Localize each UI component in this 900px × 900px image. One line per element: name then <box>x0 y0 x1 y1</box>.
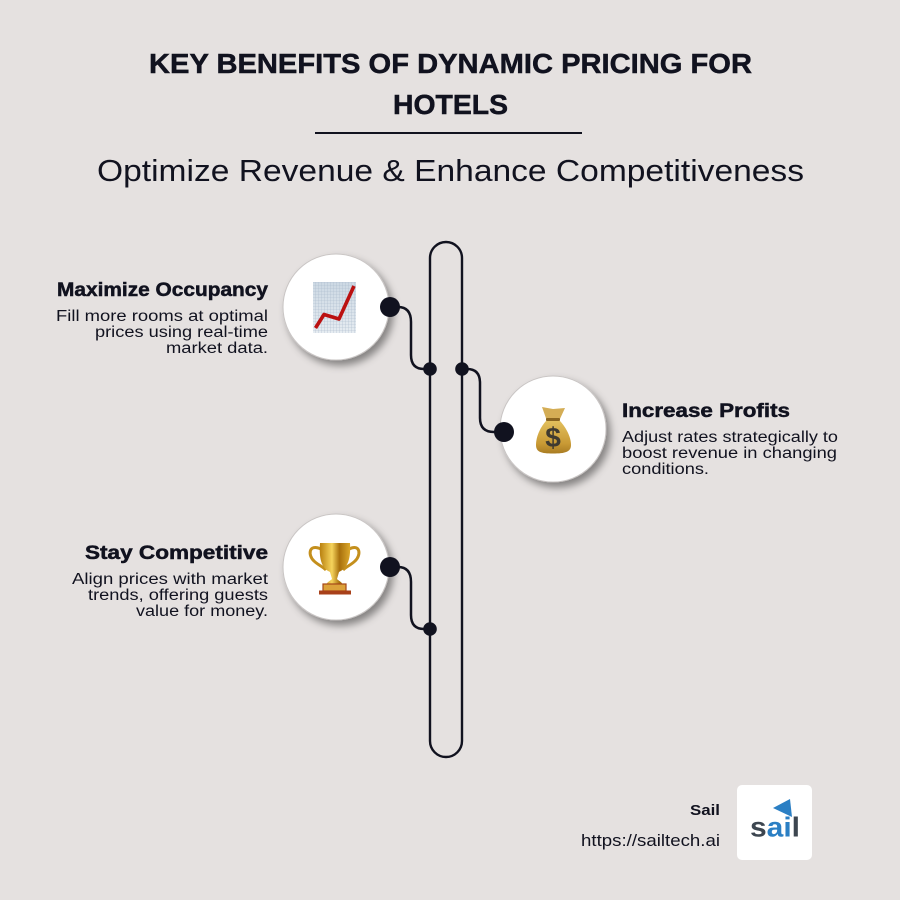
title <box>149 48 752 120</box>
text: Stay Competitive description: trends, offering guests <box>88 587 268 604</box>
text: Stay Competitive description <box>72 571 269 620</box>
icon circle: chart <box>283 254 389 360</box>
timeline pill <box>430 242 462 757</box>
text: Maximize Occupancy description: market data. <box>166 340 268 357</box>
heading: Stay Competitive: Stay Competitive <box>85 542 268 564</box>
text: Increase Profits description: boost revenue in changing <box>622 445 837 462</box>
icon circle: trophy <box>283 514 389 620</box>
text: Increase Profits description: Adjust rates strategically to <box>622 429 838 446</box>
benefit: Stay Competitive <box>72 514 437 636</box>
brand url: https://sailtech.ai <box>581 832 720 850</box>
title: HOTELS <box>393 89 508 120</box>
title: KEY BENEFITS OF DYNAMIC PRICING FOR <box>149 48 752 79</box>
heading: Increase Profits: Increase Profits <box>622 400 790 422</box>
logo: sail <box>750 812 800 842</box>
benefit: Maximize Occupancy <box>56 254 437 376</box>
text: Increase Profits description <box>622 429 838 478</box>
text: Stay Competitive description: Align prices with market <box>72 571 269 588</box>
benefit: Increase Profits <box>455 362 838 482</box>
text: Maximize Occupancy description: Fill more rooms at optimal <box>56 308 268 325</box>
brand name: Sail <box>690 802 720 819</box>
text: Increase Profits description: conditions. <box>622 461 709 478</box>
subtitle: Optimize Revenue & Enhance Competitiveness <box>97 153 804 188</box>
connector <box>380 557 437 636</box>
icon circle: money bag <box>500 376 606 482</box>
icon circle: money bag: $ <box>545 422 561 453</box>
heading: Maximize Occupancy: Maximize Occupancy <box>57 279 268 301</box>
connector <box>380 297 437 376</box>
text: Maximize Occupancy description <box>56 308 268 357</box>
text: Stay Competitive description: value for money. <box>136 603 268 620</box>
connector <box>455 362 514 442</box>
text: Maximize Occupancy description: prices using real-time <box>95 324 268 341</box>
logo <box>737 785 812 860</box>
footer brand <box>581 785 812 860</box>
